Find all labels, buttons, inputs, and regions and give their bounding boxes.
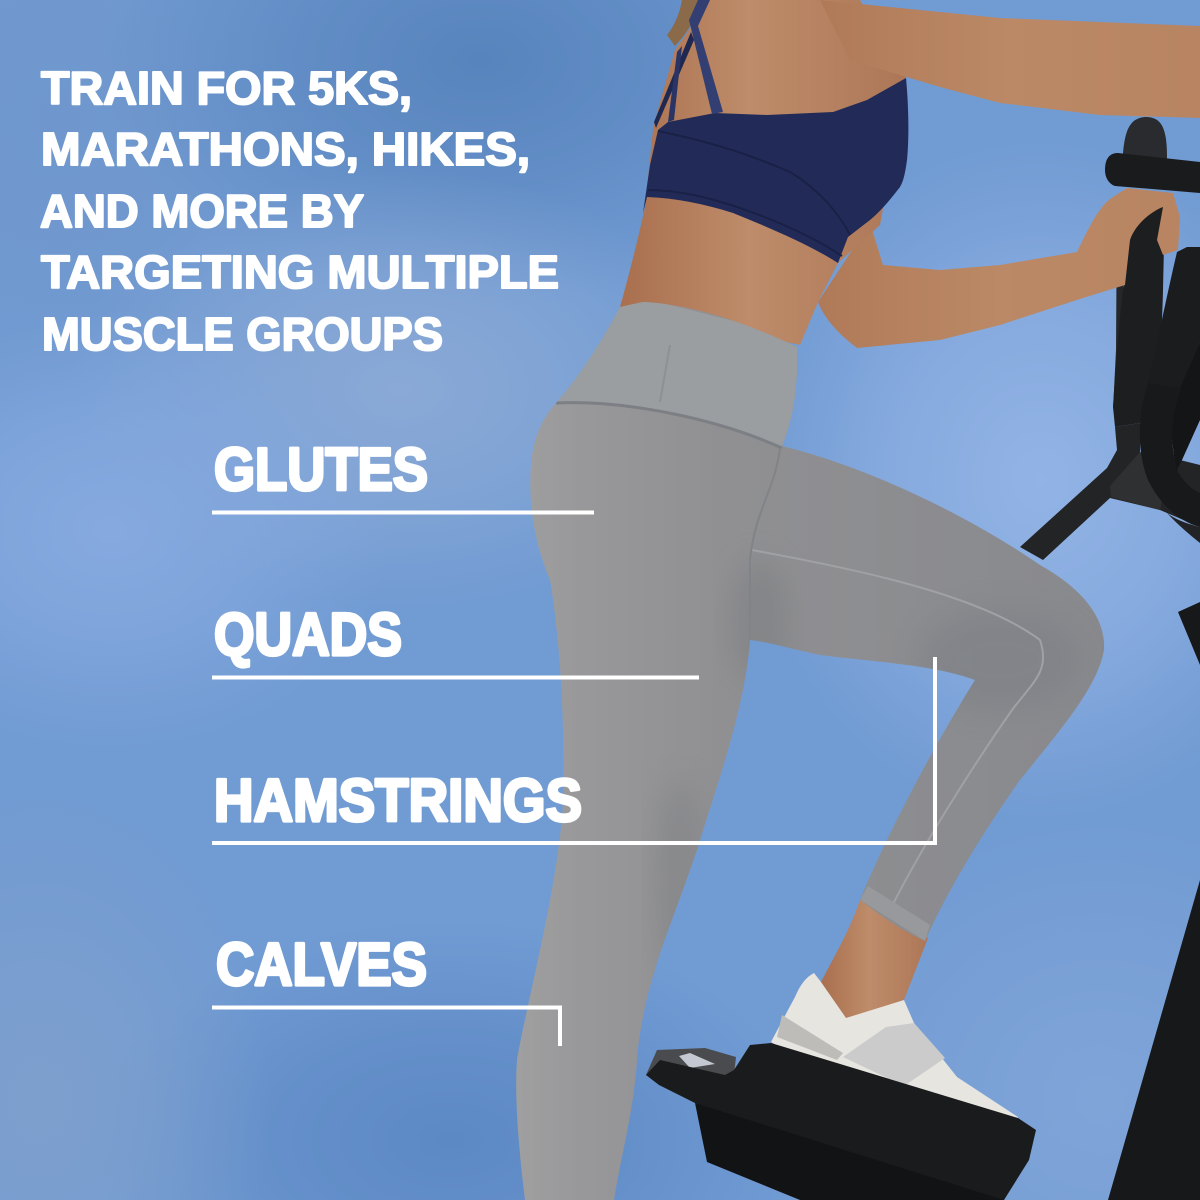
figure: near arm xyxy=(820,0,1200,118)
figure: far arm gripping handle xyxy=(818,188,1180,348)
callout: calves xyxy=(212,931,560,1046)
figure: running shoe xyxy=(771,973,1018,1127)
callout: hamstrings: HAMSTRINGS xyxy=(214,767,582,834)
figure: hair xyxy=(667,0,703,46)
callout: quads: QUADS xyxy=(214,601,402,668)
callout: calves: CALVES xyxy=(216,931,427,998)
figure: sports bra xyxy=(643,0,908,263)
callout: glutes: GLUTES xyxy=(214,436,428,503)
heading: training benefits: MARATHONS, HIKES, xyxy=(41,123,530,175)
heading: training benefits: TARGETING MULTIPLE xyxy=(41,246,559,298)
heading: training benefits xyxy=(40,62,559,360)
heading: training benefits: AND MORE BY xyxy=(40,185,364,237)
heading: training benefits: TRAIN FOR 5KS, xyxy=(41,62,412,114)
callout: hamstrings xyxy=(212,657,935,843)
exercise machine: frame and handles xyxy=(1020,117,1200,1200)
figure: torso xyxy=(620,0,906,345)
exercise machine: foot pedal xyxy=(646,1043,1036,1200)
figure: grey leggings xyxy=(510,290,1120,1200)
heading: training benefits: MUSCLE GROUPS xyxy=(42,308,443,360)
figure: raised lower leg skin xyxy=(821,900,928,1020)
